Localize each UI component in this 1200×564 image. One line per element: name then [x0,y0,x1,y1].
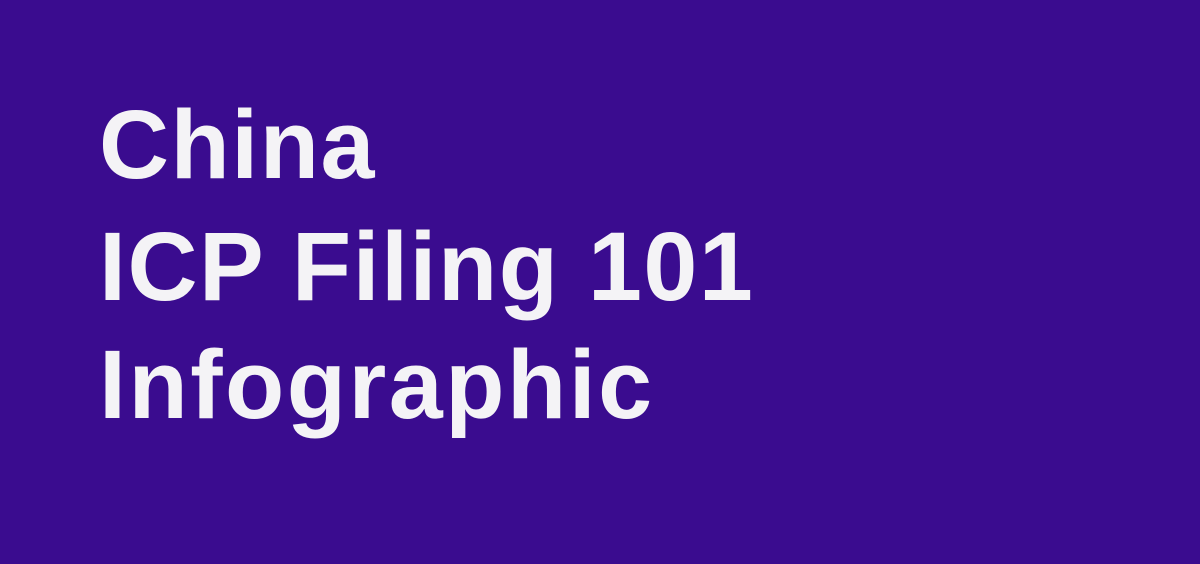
title [99,90,754,439]
title line 2: ICP Filing 101 [99,212,754,321]
title line 1: China [99,90,376,199]
title line 3: Infographic [99,330,655,439]
